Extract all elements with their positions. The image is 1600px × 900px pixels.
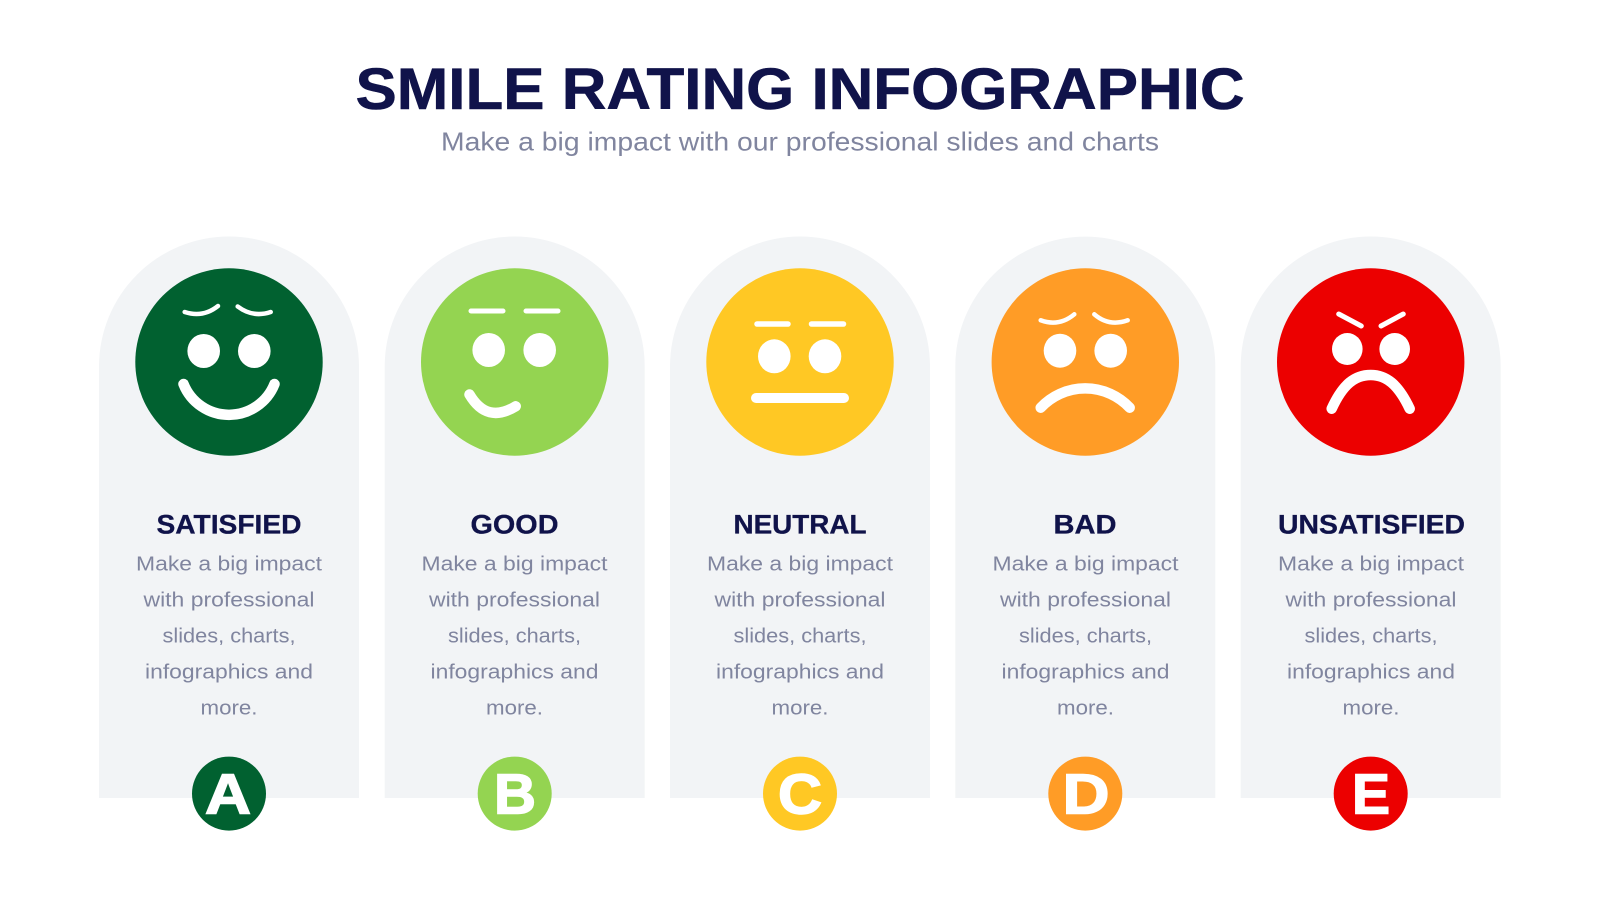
badge: D (1048, 757, 1122, 831)
icon: unsatisfied face (1277, 268, 1464, 456)
heading: good: GOOD (470, 510, 558, 540)
description: satisfied: with professional (142, 589, 314, 612)
card background (1241, 236, 1501, 798)
description: unsatisfied: more. (1342, 697, 1400, 720)
panel: neutral (670, 236, 930, 831)
card background (99, 236, 359, 798)
description: neutral (707, 553, 893, 720)
description: satisfied: Make a big impact (136, 553, 322, 576)
panel: unsatisfied (1241, 236, 1501, 831)
description: bad: more. (1057, 697, 1114, 720)
heading: bad: BAD (1054, 510, 1116, 540)
description: good: with professional (428, 589, 600, 612)
panel: bad (955, 237, 1215, 831)
description: good: Make a big impact (422, 553, 608, 576)
description: satisfied (136, 553, 322, 720)
description: satisfied: slides, charts, (162, 625, 296, 648)
card background (955, 237, 1215, 798)
description: unsatisfied: with professional (1284, 589, 1456, 612)
description: satisfied: more. (200, 697, 258, 720)
description: good: more. (486, 697, 543, 720)
badge: B: B (494, 762, 536, 826)
description: bad: slides, charts, (1019, 625, 1152, 648)
description: good (422, 553, 608, 720)
description: unsatisfied: slides, charts, (1304, 625, 1438, 648)
badge: E: E (1352, 762, 1390, 826)
heading: satisfied: SATISFIED (156, 510, 302, 540)
icon: neutral face (706, 268, 894, 456)
description: neutral: with professional (713, 589, 886, 612)
panel: good (385, 236, 645, 831)
badge: B (478, 757, 552, 831)
badge: A (192, 757, 266, 831)
icon: bad face (992, 268, 1179, 456)
description: neutral: slides, charts, (734, 625, 866, 648)
heading: neutral: NEUTRAL (734, 510, 866, 540)
card background (670, 236, 930, 798)
description: bad: with professional (999, 589, 1171, 612)
description: neutral: infographics and (716, 661, 884, 684)
badge: E (1334, 757, 1408, 831)
description: good: slides, charts, (448, 625, 581, 648)
badge: D: D (1062, 762, 1110, 826)
icon: satisfied face (135, 268, 323, 456)
description: satisfied: infographics and (145, 661, 313, 684)
badge: C (763, 757, 837, 831)
description: unsatisfied (1278, 553, 1464, 720)
description: neutral: Make a big impact (707, 553, 893, 576)
card background (385, 236, 645, 798)
heading: unsatisfied: UNSATISFIED (1278, 510, 1465, 540)
description: bad (992, 553, 1179, 720)
description: unsatisfied: Make a big impact (1278, 553, 1464, 576)
title: SMILE RATING INFOGRAPHIC (356, 57, 1244, 122)
description: neutral: more. (772, 697, 828, 720)
panel: satisfied (99, 236, 359, 831)
badge: C: C (778, 762, 822, 826)
badge: A: A (205, 762, 251, 826)
subtitle: Make a big impact with our professional slides and charts (441, 126, 1159, 156)
description: bad: infographics and (1002, 661, 1170, 684)
icon: good face (421, 268, 608, 456)
description: bad: Make a big impact (992, 553, 1179, 576)
description: good: infographics and (430, 661, 598, 684)
description: unsatisfied: infographics and (1287, 661, 1455, 684)
